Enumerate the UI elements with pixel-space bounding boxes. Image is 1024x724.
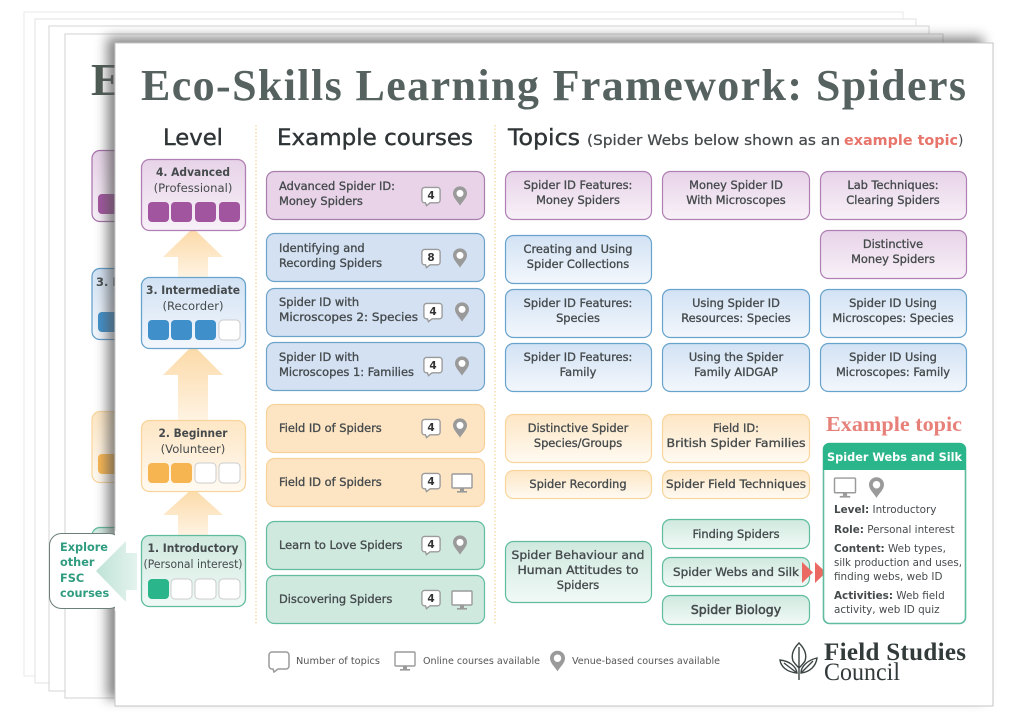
course: microscopes families: 4 <box>429 360 437 372</box>
topic: features species: Species <box>556 311 600 325</box>
course: advanced spider id <box>266 172 484 220</box>
topic: using microscopes family: Spider ID Using <box>849 350 937 364</box>
course: field id venue: 4 <box>427 422 435 434</box>
topic: behaviour and attitudes: Spiders <box>557 578 599 592</box>
arrow: beginner <box>163 488 223 535</box>
topic: spider collections <box>506 236 652 284</box>
explore other courses callout: Explore <box>60 541 108 554</box>
topic: features family <box>506 344 652 392</box>
course: identifying and recording: Recording Spiders <box>279 256 382 270</box>
topic: spider collections: Creating and Using <box>523 242 633 256</box>
heading: topics: (Spider Webs below shown as an <box>587 133 840 149</box>
topic: spider collections: Spider Collections <box>527 257 629 271</box>
topic: features money spiders <box>506 172 652 220</box>
explore other courses callout <box>50 531 125 611</box>
topic: features family: Family <box>560 365 597 379</box>
topic: distinctive species: Species/Groups <box>534 436 622 450</box>
main sheet shadow <box>107 37 983 699</box>
title: Eco-Skills Learning Framework: Spiders <box>141 61 966 110</box>
topic: behaviour and attitudes: Human Attitudes to <box>518 563 639 577</box>
topic: finding spiders: Finding Spiders <box>692 527 780 541</box>
panel: example topic card <box>823 443 966 624</box>
level 3 intermediate <box>142 278 246 348</box>
panel: example topic card: Content: Web types, <box>834 543 946 555</box>
course: microscopes species: Spider ID with <box>279 295 359 309</box>
topic: id resources <box>662 290 810 338</box>
course: discovering spiders: Discovering Spiders <box>279 592 392 606</box>
course: discovering spiders <box>266 576 484 624</box>
back sheet 2 <box>35 19 916 683</box>
heading: example courses: Example courses <box>277 126 473 151</box>
course: microscopes families: Microscopes 1: Families <box>279 365 414 379</box>
level 3 intermediate: 3. Intermediate <box>146 283 240 297</box>
column separators <box>256 125 495 625</box>
topic: spider recording <box>506 470 652 498</box>
level 1 introductory: (Personal interest) <box>144 557 242 571</box>
topic: features species <box>506 290 652 338</box>
topic: family aidgap: Family AIDGAP <box>694 365 778 379</box>
logo: field studies council: Field Studies <box>824 639 966 666</box>
topic: spider biology <box>662 596 810 624</box>
course: advanced spider id: Advanced Spider ID: <box>279 179 395 193</box>
explore other courses callout: courses <box>60 587 109 600</box>
topic: features species: Spider ID Features: <box>524 296 632 310</box>
topic: family aidgap <box>662 344 810 392</box>
topic: distinctive money spiders: Distinctive <box>863 237 923 251</box>
panel: example topic card: Activities: Web field <box>834 590 945 602</box>
course: field id online: 4 <box>427 476 435 488</box>
level 4 advanced: (Professional) <box>154 181 232 195</box>
topic: british families <box>662 414 810 462</box>
course: microscopes families <box>266 342 484 390</box>
arrow: intermediate <box>163 345 223 420</box>
topic: webs and silk: Spider Webs and Silk <box>673 565 799 579</box>
back sheet 4 with peeking content <box>65 34 943 698</box>
arrow: advanced <box>163 228 223 277</box>
course: microscopes species: Microscopes 2: Species <box>279 310 418 324</box>
course: field id online <box>266 458 484 506</box>
heading: example topic: Example topic <box>826 412 962 436</box>
course: microscopes species: 4 <box>429 306 437 318</box>
topic: behaviour and attitudes <box>506 542 652 602</box>
topic: money spider microscopes: With Microscopes <box>686 193 786 207</box>
heading: topics: Topics <box>507 126 580 151</box>
explore other courses callout: FSC <box>60 572 84 585</box>
level 1 introductory <box>142 536 246 606</box>
course: discovering spiders: 4 <box>427 593 435 605</box>
course: field id venue: Field ID of Spiders <box>279 421 382 435</box>
logo: field studies council: Council <box>824 659 900 686</box>
heading: topics: example topic <box>844 133 958 149</box>
topic: behaviour and attitudes: Spider Behaviour and <box>512 548 644 562</box>
topic: spider biology: Spider Biology <box>691 602 782 617</box>
topic: using microscopes family <box>820 344 966 392</box>
level 2 beginner: (Volunteer) <box>161 442 225 456</box>
topic: field techniques <box>662 470 810 498</box>
topic: features money spiders: Spider ID Features: <box>524 178 632 192</box>
topic: using microscopes species: Spider ID Using <box>849 296 937 310</box>
topic: lab techniques <box>820 172 966 220</box>
heading: topics: ) <box>958 133 963 149</box>
topic: webs and silk <box>662 558 810 586</box>
heading: topics <box>507 126 963 151</box>
explore other courses callout: other <box>60 556 95 569</box>
heading: level: Level <box>163 126 223 151</box>
topic: using microscopes family: Microscopes: Family <box>836 365 950 379</box>
topic: distinctive money spiders <box>820 230 966 278</box>
course: microscopes families: Spider ID with <box>279 350 359 364</box>
back sheet 1 <box>24 12 903 676</box>
topic: money spider microscopes <box>662 172 810 220</box>
topic: lab techniques: Clearing Spiders <box>846 193 940 207</box>
panel: example topic card: finding webs, web ID <box>834 571 942 583</box>
topic: using microscopes species <box>820 290 966 338</box>
course: identifying and recording <box>266 234 484 282</box>
level 4 advanced: 4. Advanced <box>156 165 230 179</box>
course: advanced spider id: 4 <box>427 190 435 202</box>
back sheet 4 with peeking content: 3. I <box>96 275 117 289</box>
panel: example topic card: Spider Webs and Silk <box>827 450 962 464</box>
course: learn to love: Learn to Love Spiders <box>279 538 403 552</box>
course: identifying and recording: 8 <box>427 252 435 264</box>
legend <box>269 651 720 672</box>
legend: Number of topics <box>296 656 380 667</box>
topic: distinctive species <box>506 414 652 462</box>
arrows: pointer to example topic <box>802 562 826 583</box>
logo: field studies council <box>780 639 966 686</box>
topic: lab techniques: Lab Techniques: <box>847 178 939 192</box>
panel: example topic card: silk production and uses, <box>834 557 962 569</box>
level 3 intermediate: (Recorder) <box>162 299 224 313</box>
panel: example topic card: Level: Introductory <box>834 504 936 516</box>
back sheet 3 <box>49 26 929 691</box>
level 4 advanced <box>142 160 246 230</box>
topic: features money spiders: Money Spiders <box>536 193 620 207</box>
topic: using microscopes species: Microscopes: Species <box>832 311 954 325</box>
level 1 introductory: 1. Introductory <box>148 541 239 555</box>
topic: id resources: Using Spider ID <box>692 296 780 310</box>
arrow: explore left <box>96 541 137 602</box>
topic: british families: Field ID: <box>713 421 759 435</box>
legend: Venue-based courses available <box>572 656 720 667</box>
course: field id online: Field ID of Spiders <box>279 475 382 489</box>
topic: distinctive money spiders: Money Spiders <box>851 252 935 266</box>
course: field id venue <box>266 404 484 452</box>
course: identifying and recording: Identifying and <box>279 241 365 255</box>
topic: spider recording: Spider Recording <box>529 477 627 491</box>
topic: field techniques: Spider Field Techniques <box>666 477 806 491</box>
course: learn to love <box>266 522 484 570</box>
main sheet <box>115 43 993 706</box>
legend: Online courses available <box>423 656 540 667</box>
topic: family aidgap: Using the Spider <box>689 350 783 364</box>
topic: money spider microscopes: Money Spider ID <box>689 178 783 192</box>
topic: distinctive species: Distinctive Spider <box>528 421 629 435</box>
topic: finding spiders <box>662 520 810 548</box>
course: microscopes species <box>266 288 484 336</box>
topic: features family: Spider ID Features: <box>524 350 632 364</box>
course: advanced spider id: Money Spiders <box>279 194 363 208</box>
topic: id resources: Resources: Species <box>681 311 791 325</box>
course: learn to love: 4 <box>427 539 435 551</box>
back sheet 4 with peeking content: E <box>91 54 122 105</box>
level 2 beginner: 2. Beginner <box>158 426 228 440</box>
level 2 beginner <box>142 420 246 492</box>
panel: example topic card: activity, web ID quiz <box>834 604 940 616</box>
panel: example topic card: Role: Personal interest <box>834 524 955 536</box>
topic: british families: British Spider Families <box>666 436 806 450</box>
